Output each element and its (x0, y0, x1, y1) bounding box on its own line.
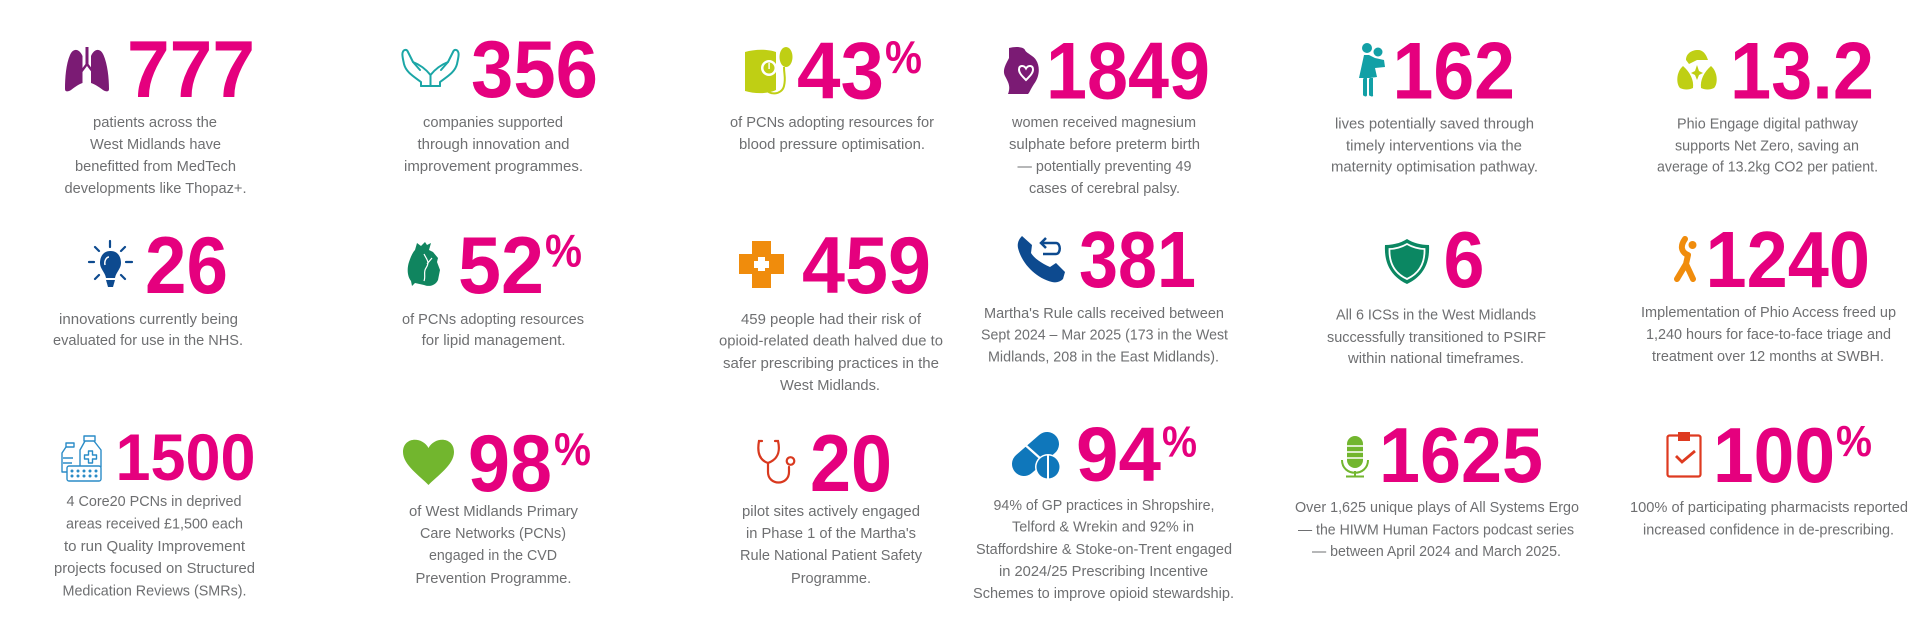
number: 381: 381 (1079, 215, 1196, 304)
stat card: 98% PCNs (403, 419, 591, 587)
icon: light bulb (89, 241, 132, 287)
description (1009, 115, 1200, 197)
description (740, 504, 923, 587)
percent sign: % (1836, 417, 1872, 466)
description (1630, 500, 1908, 539)
description: of PCNs adopting resources (402, 312, 584, 328)
stat card: 1500 pounds (54, 420, 256, 600)
number: 13.2: 13.2 (1730, 26, 1874, 116)
description (54, 494, 255, 600)
icon: clipboard with tick (1668, 432, 1700, 476)
icon: recycling leaves (1677, 50, 1717, 90)
description: — potentially preventing 49 (1018, 159, 1192, 175)
icon: microphone (1342, 436, 1368, 476)
description (409, 504, 579, 587)
description: patients across the (93, 115, 217, 131)
stat card: 94% GP practices (973, 412, 1234, 602)
icon: shield (1385, 239, 1429, 284)
description (64, 115, 246, 197)
stat card: 162 lives (1331, 26, 1538, 176)
number: 26: 26 (145, 221, 228, 311)
description: of West Midlands Primary (409, 504, 579, 520)
stat card: 52% lipid (402, 221, 584, 349)
description: women received magnesium (1011, 115, 1196, 131)
description (1331, 116, 1538, 176)
number: 43: 43 (797, 26, 884, 116)
icon: pills (1023, 443, 1061, 480)
icon: anatomical heart (408, 242, 440, 286)
description (402, 312, 584, 349)
stat card: 13.2 kg CO2 (1657, 26, 1878, 176)
number: 100: 100 (1713, 411, 1835, 499)
description: of PCNs adopting resources for (730, 115, 934, 131)
icon: blood pressure monitor (745, 47, 792, 93)
number: 356: 356 (471, 25, 598, 115)
icon: lungs (65, 47, 109, 91)
description: timely interventions via the (1346, 138, 1522, 154)
description: engaged in the CVD (429, 548, 557, 564)
description: 100% of participating pharmacists reported (1630, 500, 1908, 516)
description: 4 Core20 PCNs in deprived (66, 494, 242, 510)
description (1327, 308, 1546, 367)
number: 94: 94 (1076, 412, 1161, 498)
description: Sept 2024 – Mar 2025 (173 in the West (981, 328, 1228, 344)
stat card: 1849 women (1004, 26, 1210, 197)
number: 162: 162 (1392, 26, 1515, 116)
description: Medication Reviews (SMRs). (62, 584, 246, 600)
description: companies supported (423, 115, 563, 131)
description: West Midlands. (780, 378, 880, 394)
number: 52: 52 (458, 221, 544, 311)
description: developments like Thopaz+. (64, 181, 246, 197)
stat card: 1240 hours (1641, 215, 1896, 365)
description: Midlands, 208 in the East Midlands). (988, 350, 1219, 366)
icon: woman holding child (1359, 43, 1385, 96)
number: 1240: 1240 (1706, 215, 1870, 304)
description: increased confidence in de-prescribing. (1643, 523, 1894, 539)
icon: stethoscope (758, 441, 794, 482)
description: lives potentially saved through (1335, 116, 1534, 132)
description: innovations currently being (59, 312, 238, 328)
description (1295, 500, 1579, 560)
description: Care Networks (PCNs) (420, 526, 566, 542)
description: blood pressure optimisation. (739, 137, 925, 153)
description: benefitted from MedTech (75, 159, 236, 175)
icon: medical cross (739, 241, 784, 288)
description (1657, 116, 1878, 176)
description (981, 306, 1228, 366)
percent sign: % (554, 423, 591, 475)
number: 1625: 1625 (1379, 411, 1543, 499)
description (719, 312, 943, 394)
description: West Midlands have (90, 137, 221, 153)
description: Prevention Programme. (416, 571, 572, 587)
stat card: 20 pilot sites (740, 419, 923, 587)
description: through innovation and (418, 137, 570, 153)
description: 94% of GP practices in Shropshire, (994, 498, 1214, 514)
stat card: 459 opioid risk (719, 221, 943, 394)
number: 20: 20 (810, 419, 892, 509)
number: 459: 459 (802, 221, 931, 311)
description: maternity optimisation pathway. (1331, 160, 1538, 176)
description: Rule National Patient Safety (740, 548, 923, 564)
icon: green heart (403, 440, 454, 485)
description: successfully transitioned to PSIRF (1327, 330, 1546, 346)
description: pilot sites actively engaged (742, 504, 920, 520)
percent sign: % (885, 31, 922, 83)
stat card: 26 innovations (53, 221, 243, 349)
number: 1849: 1849 (1046, 26, 1210, 116)
description: 459 people had their risk of (741, 312, 922, 328)
description: Staffordshire & Stoke-on-Trent engaged (976, 542, 1232, 558)
description: Phio Engage digital pathway (1677, 116, 1859, 132)
description: supports Net Zero, saving an (1675, 138, 1859, 154)
stat card: 6 ICSs (1327, 215, 1546, 367)
icon: pregnant woman with heart (1004, 47, 1039, 94)
description (404, 115, 583, 175)
description (973, 498, 1234, 602)
description: projects focused on Structured (54, 561, 255, 577)
description: 1,240 hours for face-to-face triage and (1646, 327, 1891, 343)
number: 6: 6 (1444, 215, 1484, 304)
stat card: 356 companies (402, 25, 598, 175)
description: All 6 ICSs in the West Midlands (1336, 308, 1536, 324)
description (1641, 305, 1896, 365)
icon: phone with return arrow (1018, 236, 1065, 282)
stat card: 43% blood pressure (730, 26, 934, 153)
percent sign: % (1162, 418, 1197, 466)
description: in 2024/25 Prescribing Incentive (999, 564, 1208, 580)
number: 777: 777 (127, 25, 255, 115)
number: 98: 98 (468, 419, 552, 509)
percent sign: % (545, 224, 582, 276)
description: improvement programmes. (404, 159, 583, 175)
description: Schemes to improve opioid stewardship. (973, 586, 1234, 602)
description: Martha's Rule calls received between (984, 306, 1224, 322)
icon: open hands (402, 50, 459, 86)
icon: person stretching (1677, 239, 1696, 279)
description: average of 13.2kg CO2 per patient. (1657, 160, 1878, 176)
stat card: 1625 podcast plays (1295, 411, 1579, 560)
description: — the HIWM Human Factors podcast series (1298, 523, 1574, 539)
description: — between April 2024 and March 2025. (1312, 544, 1561, 560)
number: 1500: 1500 (116, 420, 256, 494)
description (53, 312, 243, 349)
description: Over 1,625 unique plays of All Systems Ergo (1295, 500, 1579, 516)
stat card: 381 Martha's Rule calls (981, 215, 1228, 366)
description: evaluated for use in the NHS. (53, 333, 243, 349)
description: to run Quality Improvement (64, 539, 245, 555)
description: within national timeframes. (1347, 351, 1524, 367)
description (730, 115, 934, 153)
description: for lipid management. (422, 333, 566, 349)
stat card: 100% pharmacists (1630, 411, 1908, 539)
description: areas received £1,500 each (66, 517, 243, 533)
description: Programme. (791, 571, 871, 587)
description: opioid-related death halved due to (719, 334, 943, 350)
stat card: 777 patients (64, 25, 255, 197)
description: Telford & Wrekin and 92% in (1012, 520, 1194, 536)
description: cases of cerebral palsy. (1029, 181, 1180, 197)
description: treatment over 12 months at SWBH. (1652, 349, 1884, 365)
icon: medicine bottles and blister pack (62, 436, 101, 481)
description: in Phase 1 of the Martha's (746, 526, 916, 542)
description: safer prescribing practices in the (723, 356, 939, 372)
description: sulphate before preterm birth (1009, 137, 1200, 153)
description: Implementation of Phio Access freed up (1641, 305, 1896, 321)
